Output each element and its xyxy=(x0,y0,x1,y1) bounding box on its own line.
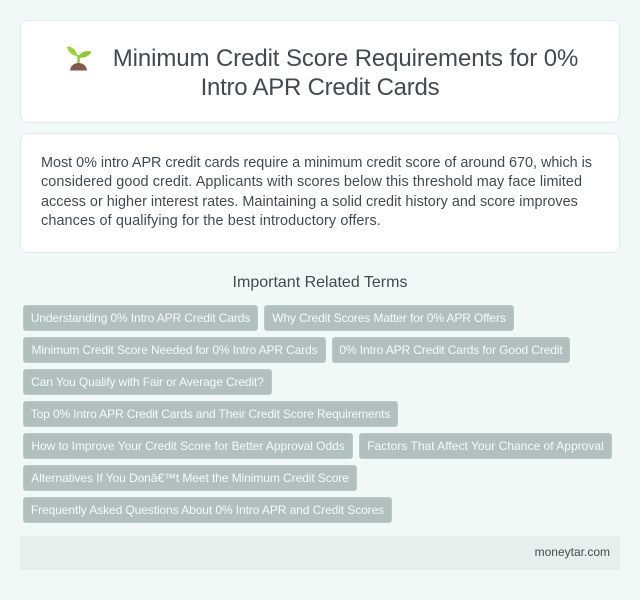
tag: How to Improve Your Credit Score for Better Approval Odds xyxy=(31,439,345,453)
tag: Factors That Affect Your Chance of Approval xyxy=(367,439,604,453)
tag: Top 0% Intro APR Credit Cards and Their Credit Score Requirements xyxy=(31,407,390,421)
tag xyxy=(23,401,398,427)
title: Minimum Credit Score Requirements for 0% xyxy=(113,45,578,72)
text block: summary: considered good credit. Applicants with scores below this threshold may face limited xyxy=(41,174,582,190)
tag group: related terms xyxy=(23,305,612,523)
tag xyxy=(332,337,570,363)
tag: Alternatives If You Donâ€™t Meet the Minimum Credit Score xyxy=(31,471,349,485)
tag: 0% Intro APR Credit Cards for Good Credit xyxy=(339,343,563,357)
tag: Can You Qualify with Fair or Average Credit? xyxy=(31,375,264,389)
text block: summary xyxy=(41,155,592,229)
tag xyxy=(359,433,612,459)
footer: source: moneytar.com xyxy=(535,545,610,559)
title: Intro APR Credit Cards xyxy=(201,74,439,101)
text block: summary: access or higher interest rates. Maintaining a solid credit history and score improves xyxy=(41,194,578,210)
heading: related terms: Important Related Terms xyxy=(233,274,407,291)
tag xyxy=(23,337,326,363)
tag: Understanding 0% Intro APR Credit Cards xyxy=(31,311,250,325)
tag xyxy=(264,305,514,331)
title xyxy=(113,45,578,101)
tag: Frequently Asked Questions About 0% Intro APR and Credit Scores xyxy=(31,503,384,517)
tag xyxy=(23,465,357,491)
panel: summary xyxy=(20,133,620,253)
tag xyxy=(23,369,272,395)
text block: summary: chances of qualifying for the best introductory offers. xyxy=(41,213,381,229)
tag xyxy=(23,497,392,523)
tag xyxy=(23,305,258,331)
tag xyxy=(23,433,353,459)
text block: summary: Most 0% intro APR credit cards require a minimum credit score of around 670, which is xyxy=(41,155,592,171)
icon: seedling xyxy=(67,46,92,70)
tag: Minimum Credit Score Needed for 0% Intro APR Cards xyxy=(31,343,318,357)
panel: title card xyxy=(20,20,620,123)
tag: Why Credit Scores Matter for 0% APR Offers xyxy=(272,311,506,325)
footer bar xyxy=(20,536,620,570)
